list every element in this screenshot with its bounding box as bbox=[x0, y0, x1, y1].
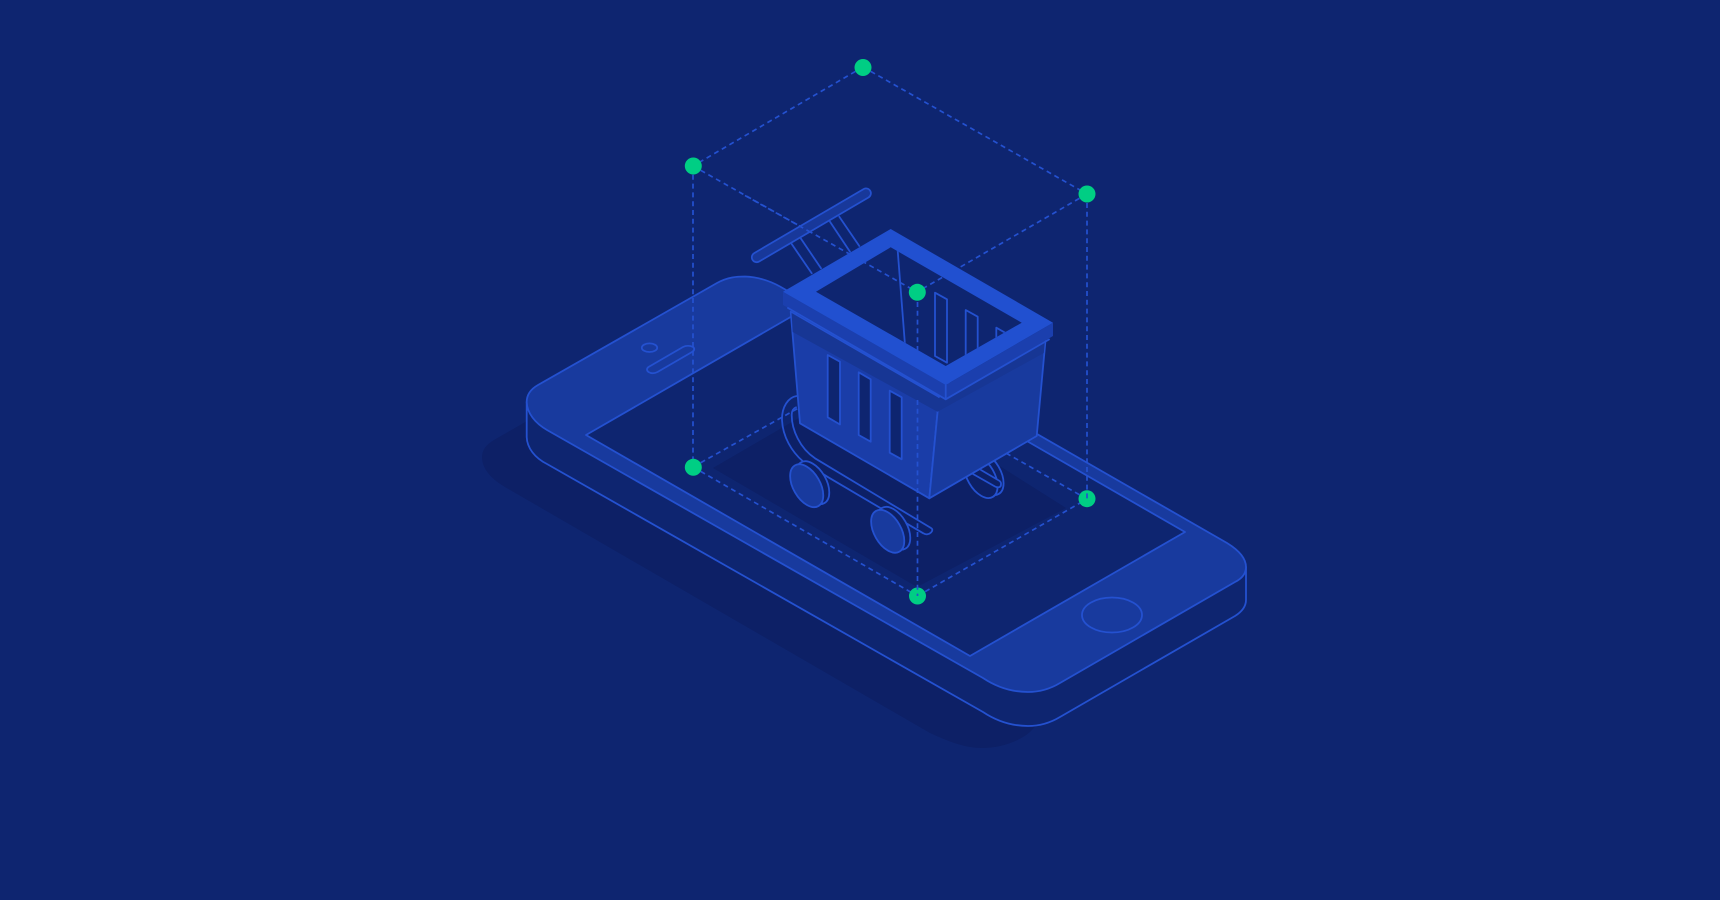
basket right face bbox=[929, 335, 1046, 498]
slots on left face bbox=[828, 355, 902, 459]
green node: lower left bbox=[685, 459, 702, 476]
handle bar bbox=[757, 193, 866, 257]
phone speaker bbox=[647, 346, 694, 373]
basket left face bbox=[791, 312, 939, 498]
handle connectors bbox=[792, 217, 859, 273]
phone camera bbox=[642, 343, 657, 352]
green node: bottom front bbox=[909, 588, 926, 604]
wheel: left bbox=[783, 456, 836, 513]
rim shadow band bbox=[792, 313, 1045, 412]
wheel: front bbox=[864, 501, 917, 558]
dashed bounding box: back and floor lines bbox=[693, 67, 1087, 596]
rim top bbox=[783, 229, 1053, 385]
green node: lower right bbox=[1078, 490, 1096, 507]
green node: upper left bbox=[685, 158, 702, 174]
cart handle bbox=[745, 193, 866, 273]
phone ground shadow bbox=[482, 402, 1060, 748]
rim lower outline bbox=[788, 308, 1049, 399]
green node: centre bbox=[909, 284, 926, 301]
cart frame tube bbox=[782, 396, 932, 534]
dashed verticals over nodes and basket front bbox=[918, 203, 1087, 596]
rim left side bbox=[783, 292, 946, 399]
phone side wall bbox=[527, 402, 1246, 726]
green node: top bbox=[854, 59, 872, 76]
phone screen bbox=[586, 311, 1185, 656]
rim right side bbox=[946, 323, 1053, 399]
green node: upper right bbox=[1078, 186, 1096, 202]
phone home button bbox=[1082, 598, 1142, 632]
phone top face bbox=[527, 276, 1246, 692]
isometric illustration bbox=[482, 59, 1247, 748]
basket interior bbox=[896, 251, 1006, 364]
wheel: rear right with axle bbox=[958, 446, 1010, 504]
phone bbox=[527, 276, 1246, 726]
shopping basket bbox=[783, 229, 1053, 500]
cart shadow on screen bbox=[713, 380, 1066, 587]
